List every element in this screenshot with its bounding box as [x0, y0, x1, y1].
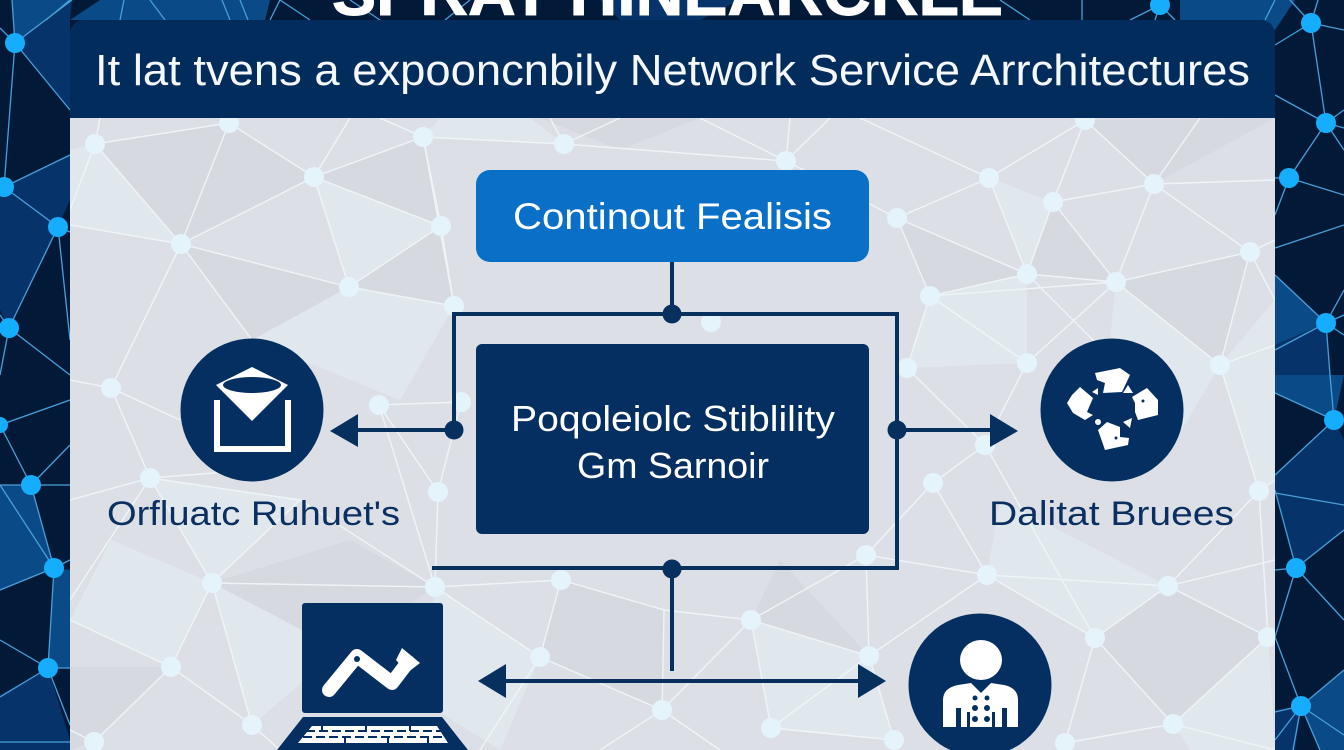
label: left: Orfluatc Ruhuet's — [107, 495, 400, 533]
panel: header band — [70, 20, 1275, 118]
icon: envelope circle — [180, 338, 324, 482]
box: central dark panel — [476, 344, 869, 534]
box: central dark panel: Gm Sarnoir — [577, 445, 769, 486]
connector lines — [355, 262, 992, 681]
panel: light mesh background — [70, 110, 1278, 750]
arrow: bottom double-headed — [478, 664, 886, 698]
box: central dark panel: Poqoleiolc Stiblility — [511, 398, 835, 439]
icon: puzzle circle — [1040, 338, 1184, 482]
box: top blue heading — [476, 170, 869, 262]
arrow: right to puzzle icon — [990, 414, 1018, 447]
subtitle: It lat tvens a expooncnbily Network Service Arrchitectures — [95, 46, 1250, 95]
box: top blue heading: Continout Fealisis — [513, 196, 832, 237]
icon: laptop with trend line — [277, 603, 468, 750]
arrow: left to envelope icon — [330, 414, 358, 447]
label: right: Dalitat Bruees — [989, 495, 1234, 533]
icon: person circle — [908, 614, 1052, 750]
